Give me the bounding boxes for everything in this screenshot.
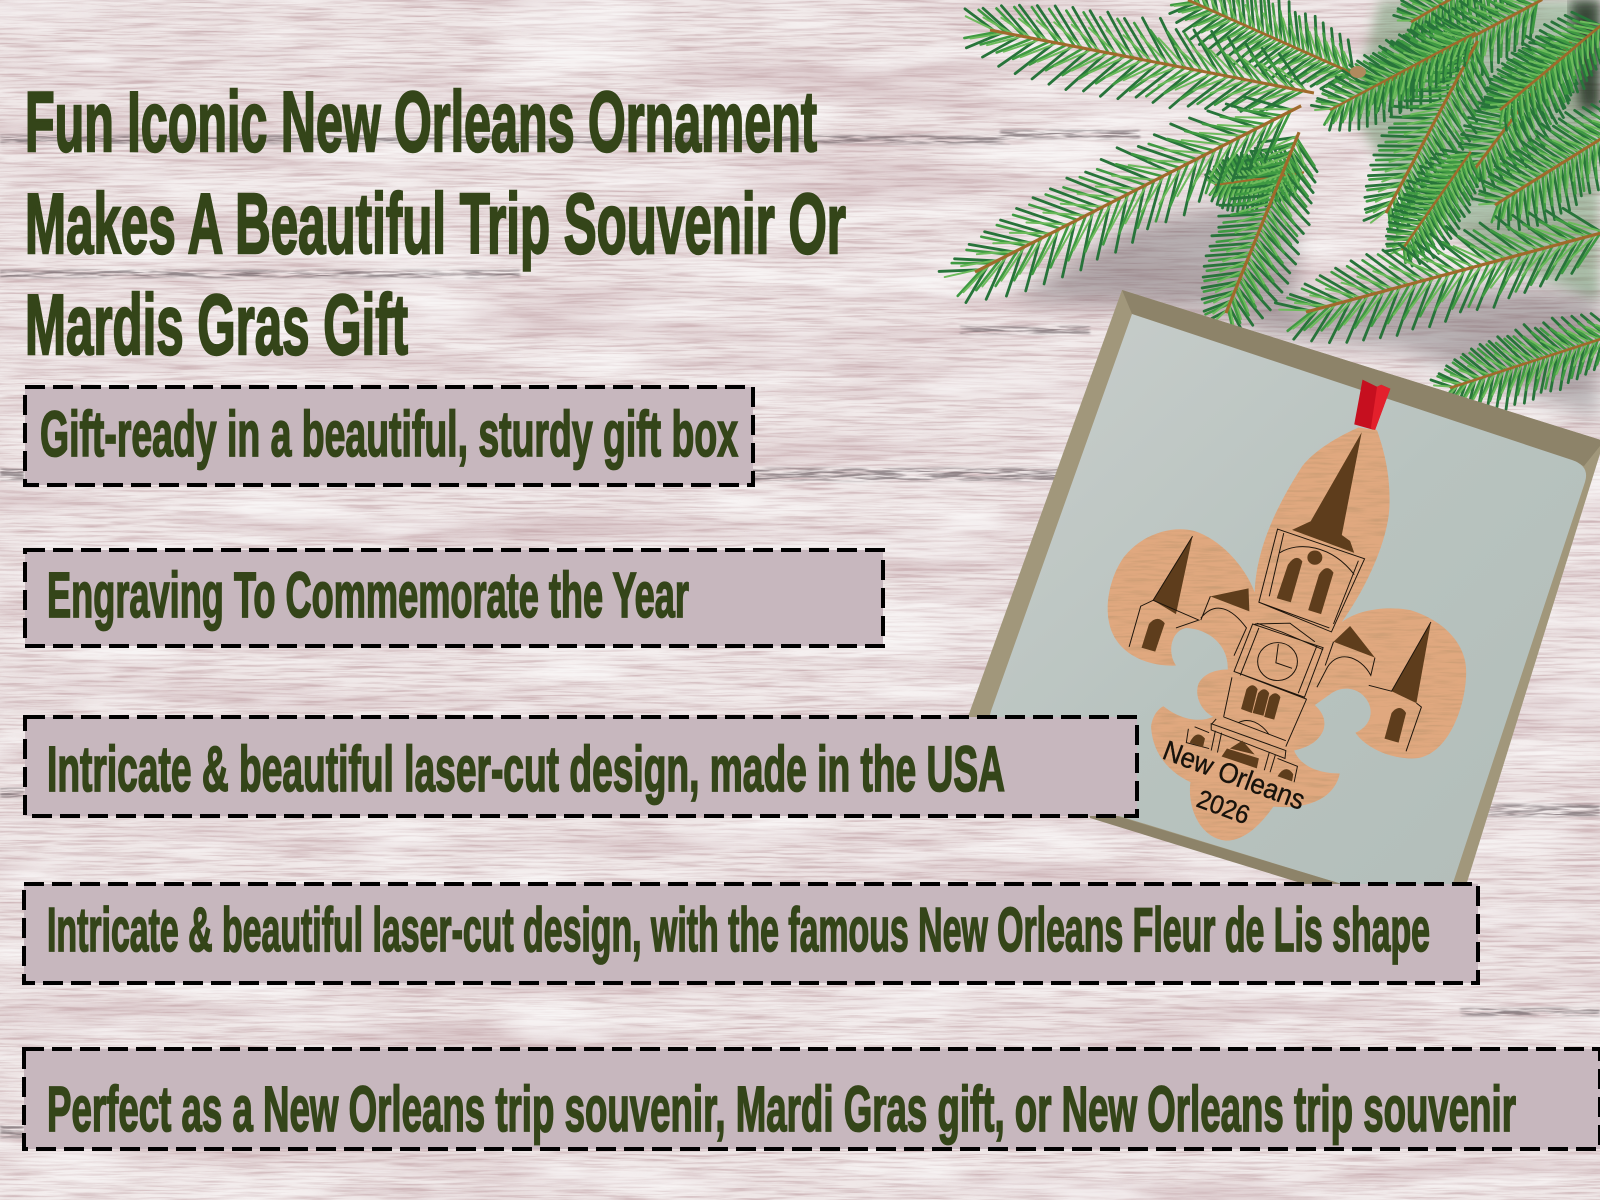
tower lower body: [1211, 677, 1307, 758]
left arched window: [1142, 619, 1165, 652]
title: Mardis Gras Gift: [25, 278, 408, 373]
right roof: [1334, 626, 1375, 658]
base doors: [1190, 735, 1293, 781]
clock face: [1258, 643, 1297, 681]
red ribbon: [1354, 380, 1390, 430]
branch: upper left long: [954, 0, 1322, 136]
feature box: engraving: [25, 550, 883, 646]
title: Makes A Beautiful Trip Souvenir Or: [25, 177, 846, 272]
tower round window: [1307, 550, 1322, 565]
feature box: engraving: Engraving To Commemorate the Year: [47, 559, 689, 631]
box paper liner: [975, 314, 1586, 892]
gift box: [948, 290, 1600, 892]
right spire body: [1369, 622, 1431, 751]
branch: bottom right: [1424, 297, 1600, 428]
clock tower frame: [1234, 623, 1323, 699]
branch: centre upright: [1339, 20, 1516, 249]
branch: left long: [926, 65, 1322, 328]
feature box: gift box: [25, 387, 753, 485]
branch: lower right long: [1268, 186, 1600, 364]
branch: top far right: [1381, 0, 1548, 62]
clock hands: [1276, 644, 1292, 668]
ornament year label: 2026: [1193, 783, 1254, 830]
feature box: fleur de lis: [24, 884, 1478, 983]
title: Fun Iconic New Orleans Ornament: [25, 75, 817, 170]
main spire: [1292, 432, 1362, 553]
branch: inner spur: [1301, 1, 1492, 148]
branch: upper far right: [1432, 13, 1600, 207]
branch: right of tower: [1466, 0, 1600, 148]
ribbon fold: [1371, 385, 1390, 430]
branch: far right mid: [1460, 80, 1600, 250]
left roof: [1210, 588, 1249, 611]
lower arched windows: [1241, 685, 1280, 720]
bud: [1350, 66, 1366, 78]
dark foliage backdrop: [1350, 0, 1600, 300]
pine branches: [926, 0, 1600, 428]
feature box: gift box: Gift-ready in a beautiful, sturdy gift box: [40, 398, 738, 470]
base columns: [1186, 727, 1297, 782]
branch: centre down: [1177, 115, 1342, 346]
fleur de lis wooden shape: [1108, 427, 1466, 841]
box outer walls: [948, 290, 1600, 892]
left spire: [1153, 536, 1193, 614]
branch: upper middle: [1157, 0, 1374, 112]
feature box: laser-cut USA: [25, 717, 1137, 816]
box top wall: [1122, 290, 1600, 466]
branch: top right upright: [1344, 0, 1562, 131]
right arch: [1317, 642, 1375, 687]
tower arched windows: [1277, 558, 1334, 614]
left spire body: [1129, 536, 1199, 647]
corner shadow: [1570, 0, 1600, 110]
branch shadows: [1010, 190, 1600, 420]
ornament city label: New Orleans: [1159, 735, 1309, 816]
left arch: [1201, 596, 1246, 656]
branch: inner lower twig: [1367, 132, 1500, 279]
title: [25, 75, 846, 373]
right spire: [1392, 622, 1431, 703]
right arched window: [1385, 708, 1406, 743]
bell tower outline: [1259, 529, 1365, 632]
branch: small inner twig: [1203, 142, 1308, 217]
ornament drawn in local coords: [1108, 380, 1466, 841]
box bottom wall: [1090, 808, 1345, 892]
